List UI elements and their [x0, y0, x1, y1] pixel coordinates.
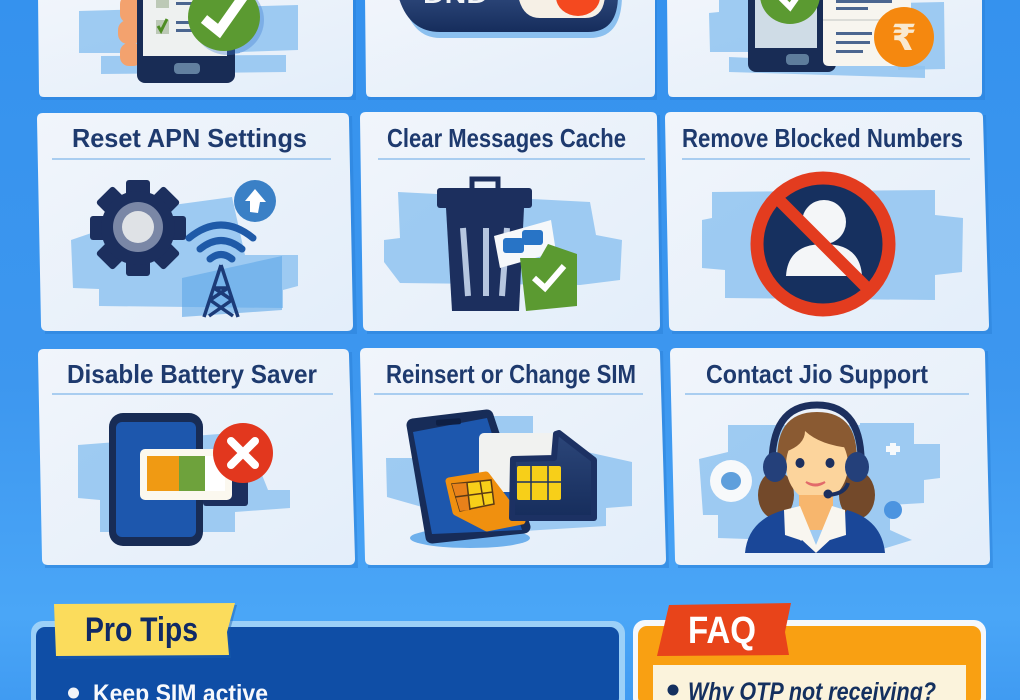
- heading: Clear Messages Cache: [387, 123, 626, 153]
- icon: phone with hand and green check: [118, 0, 264, 83]
- icon: blocked user: [757, 178, 889, 310]
- icon: DND toggle: [398, 0, 622, 38]
- icon: up arrow badge: [234, 180, 276, 222]
- panel: recharge card (top row, right): [667, 0, 985, 100]
- icon: phone, bill and rupee coin: ₹: [891, 18, 917, 59]
- banner: Pro Tips label: [54, 603, 237, 659]
- heading: Reset APN Settings: [72, 123, 307, 153]
- icon: gear: [90, 180, 186, 276]
- panel: DND toggle card (top row, centre): [365, 0, 657, 100]
- icon: phone and SIM cards: [413, 416, 594, 537]
- heading: Disable Battery Saver: [67, 359, 317, 389]
- icon: plus: [886, 443, 900, 455]
- icon: phone, bill and rupee coin: [748, 0, 934, 72]
- panel: Reinsert or Change SIM: [360, 348, 669, 568]
- panel: Disable Battery Saver: [38, 349, 358, 568]
- panel: Remove Blocked Numbers: [665, 112, 992, 334]
- banner: Pro Tips label: Pro Tips: [85, 611, 198, 649]
- banner: FAQ label: [657, 603, 791, 656]
- heading: Remove Blocked Numbers: [682, 123, 963, 153]
- heading: Contact Jio Support: [706, 359, 928, 389]
- heading: Reinsert or Change SIM: [386, 359, 636, 389]
- panel: check list card (top row, left): [38, 0, 356, 100]
- icon: trash can with messages and green box: [437, 179, 577, 311]
- panel: Clear Messages Cache: [360, 112, 663, 334]
- icon: support agent with headset: [745, 405, 885, 553]
- banner: FAQ label: FAQ: [688, 610, 756, 652]
- icon: phone with battery and red cross: [109, 413, 273, 546]
- panel: Contact Jio Support: [670, 348, 993, 568]
- panel: FAQ: [633, 603, 986, 700]
- box: FAQ question: [653, 665, 966, 700]
- panel: Pro Tips: [31, 603, 625, 700]
- icon: signal tower: [189, 225, 253, 317]
- panel: Reset APN Settings: [37, 113, 357, 334]
- icon: white chat ring: [710, 460, 752, 502]
